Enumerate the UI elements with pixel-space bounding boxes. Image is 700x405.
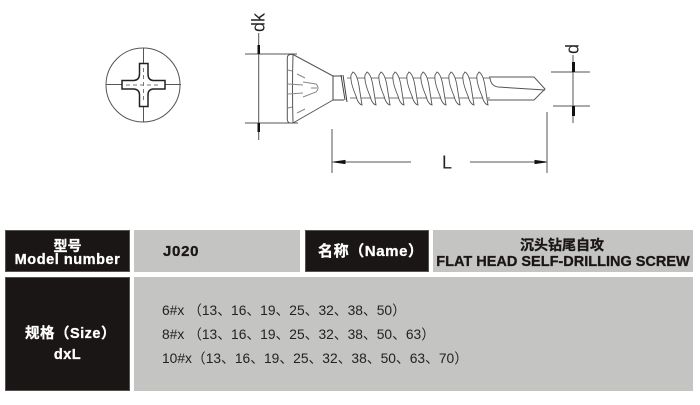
size row: 6#: 6#x （13、16、19、25、32、38、50） xyxy=(162,303,406,318)
dimension: L: L xyxy=(442,152,452,172)
header: model number label: Model number xyxy=(15,252,120,268)
dimension: dk: dk xyxy=(248,12,268,32)
dimension: dk xyxy=(245,12,298,140)
technical drawing xyxy=(106,12,590,173)
screw side view xyxy=(287,54,545,123)
drill tip xyxy=(488,77,545,100)
model number value: J020 xyxy=(163,243,199,260)
screw head xyxy=(287,54,333,123)
product name value: FLAT HEAD SELF-DRILLING SCREW xyxy=(436,254,690,270)
model number value xyxy=(134,230,300,272)
product name value: 沉头钻尾自攻 xyxy=(520,237,604,253)
header: size label: dxL xyxy=(54,347,81,363)
header: size label xyxy=(5,277,130,391)
header: name label: 名称（Name） xyxy=(318,243,424,260)
dimension: L xyxy=(332,112,547,173)
size list panel xyxy=(134,277,693,391)
size row: 10#: 10#x（13、16、19、25、32、38、50、63、70） xyxy=(162,351,468,366)
screw threads xyxy=(347,72,490,105)
dimension: d: d xyxy=(562,44,582,54)
dimension: d xyxy=(551,44,590,123)
icon: screw head top view xyxy=(106,48,181,122)
header: size label: 规格（Size） xyxy=(25,326,116,342)
size row: 8#: 8#x （13、16、19、25、32、38、50、63） xyxy=(162,327,435,342)
header: name label xyxy=(305,230,429,272)
screw neck xyxy=(333,76,344,100)
product name value xyxy=(433,230,693,272)
header: model number label xyxy=(5,230,130,272)
header: model number label: 型号 xyxy=(54,238,82,254)
